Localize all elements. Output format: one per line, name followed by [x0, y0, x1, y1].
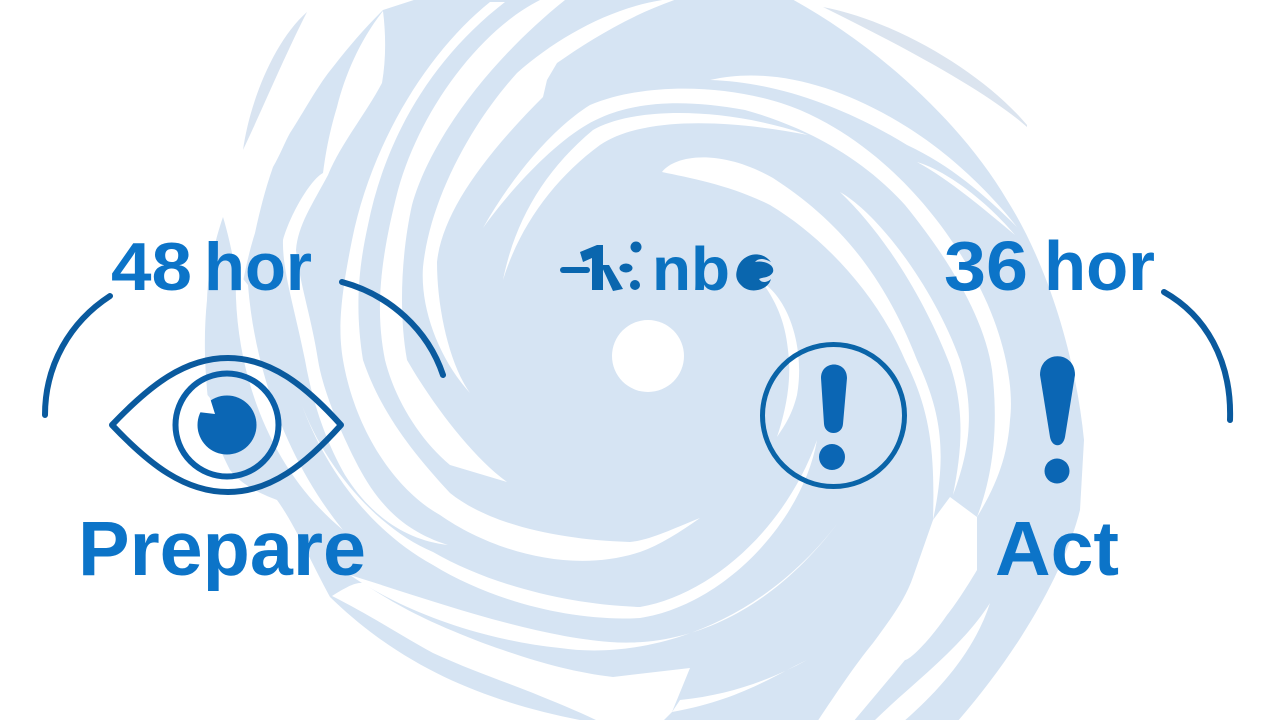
icon: exclamation: [1040, 356, 1075, 484]
streak: thin right arc: [840, 192, 969, 495]
heading: 36 hor: [944, 227, 1155, 305]
streak: top right arc: [710, 75, 1017, 227]
arcs: left timer: [45, 282, 443, 415]
streak: inner hooked arc: [662, 157, 941, 520]
center logo: [560, 235, 773, 303]
icon: eye: [112, 358, 341, 492]
streak: inner disc edge: [423, 0, 680, 393]
heading: 48 hor: hor: [204, 229, 312, 305]
streak: band three: [380, 0, 565, 482]
heading: 36 hor: hor: [1044, 227, 1155, 305]
streak: lowest spiral: [350, 516, 843, 650]
streak: bottom right tip: [873, 603, 990, 720]
label: Prepare: Prepare: [78, 506, 366, 592]
streak: second inner arc: [503, 113, 808, 280]
streak: lower spiral: [300, 400, 817, 618]
wisp: upper left: [243, 12, 307, 150]
streak: outer left: [236, 270, 343, 530]
logo text: nb: nb: [652, 235, 730, 303]
streak: arc beside logo: [762, 282, 799, 437]
streak: bottom short arc: [672, 660, 807, 712]
hurricane swirl background: [205, 0, 1084, 720]
logo glyphs: [560, 242, 773, 291]
gap above lower wisp: [332, 583, 690, 720]
left group: 48 hours prepare: [45, 229, 443, 592]
streak: right short arc: [917, 162, 1015, 235]
label: Act: Act: [995, 506, 1119, 592]
eye of the storm: [612, 320, 684, 392]
right group: 36 hours act: [762, 227, 1230, 592]
heading: 48 hor: 48: [111, 229, 192, 305]
heading: 36 hor: 36: [944, 227, 1028, 305]
wisp: upper right: [823, 7, 1027, 127]
heading: 48 hor: [111, 229, 312, 305]
icon: circled exclamation: [762, 344, 904, 486]
streak: upper left wedge: [283, 11, 448, 545]
streak: main spiral arm: [483, 89, 1011, 517]
streak: band two: [340, 2, 700, 561]
swirl body: [205, 0, 1084, 720]
arc: right timer: [1164, 292, 1230, 420]
wedge: large right white area: [817, 497, 977, 720]
white swirl streaks: [236, 0, 1017, 720]
